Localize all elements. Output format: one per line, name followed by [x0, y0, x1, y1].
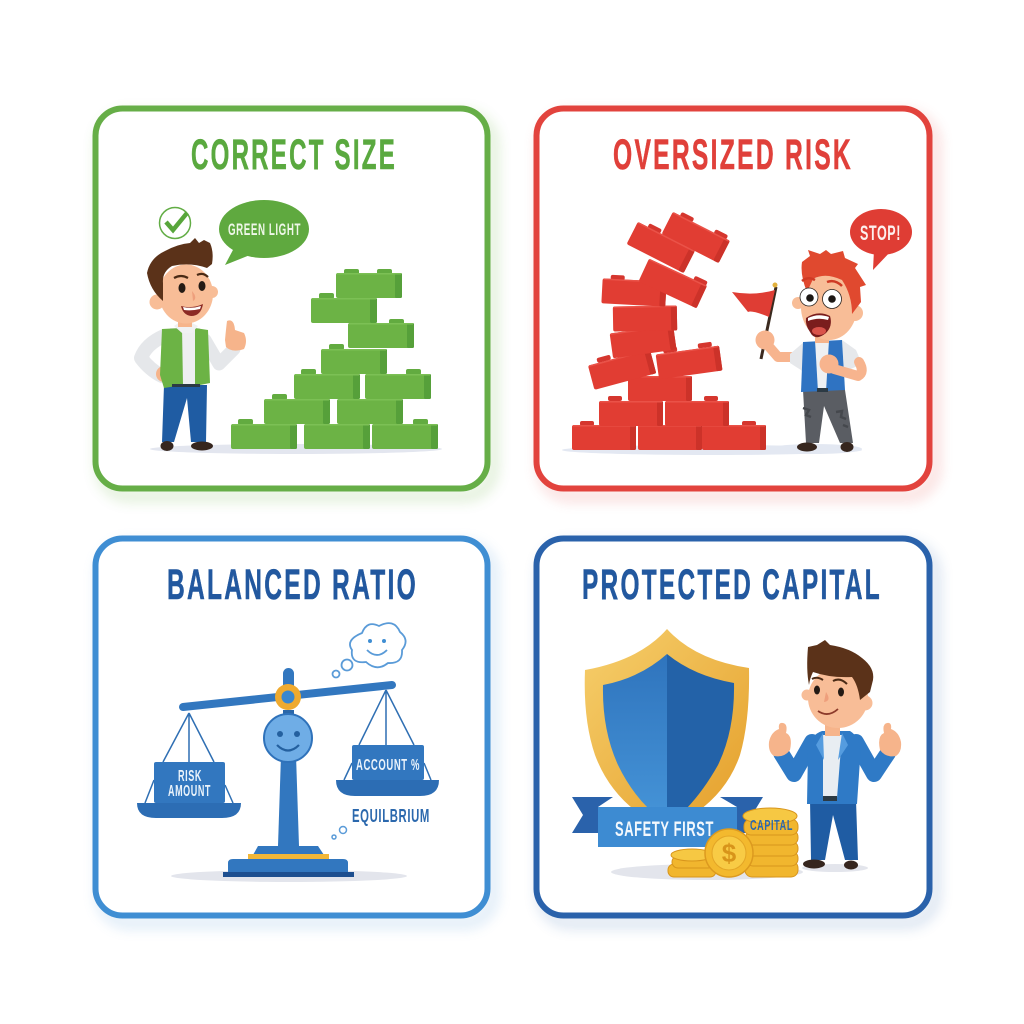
- gold coin stacks: [668, 808, 798, 877]
- speech bubble: green light: [219, 200, 309, 265]
- toppling red bricks: [562, 208, 862, 455]
- gold coin stacks: CAPITAL: [750, 817, 793, 834]
- shield with ribbon: [572, 629, 803, 880]
- title: oversized risk: OVERSIZED RISK: [613, 131, 853, 179]
- label: equilibrium: EQUILBRIUM: [352, 806, 430, 826]
- character: happy trader: [141, 238, 442, 454]
- right pan: account percent: ACCOUNT %: [356, 757, 420, 774]
- speech bubble: stop: [850, 209, 912, 270]
- speech bubble: green light: GREEN LIGHT: [228, 220, 301, 239]
- panel: protected capital: [536, 538, 935, 923]
- left pan: risk amount: RISK: [178, 768, 202, 785]
- big dollar coin: $: [722, 838, 737, 868]
- small thought bubbles: [332, 826, 346, 839]
- ribbon: safety first: SAFETY FIRST: [615, 818, 714, 841]
- speech bubble: stop: STOP!: [860, 222, 901, 245]
- left pan: risk amount: AMOUNT: [168, 783, 211, 800]
- title: balanced ratio: BALANCED RATIO: [167, 561, 418, 609]
- smiley gauge: [264, 714, 312, 762]
- panel: oversized risk: [536, 108, 935, 496]
- right pan: account percent: [336, 690, 439, 796]
- stacked green bricks: [231, 269, 438, 449]
- title: correct size: CORRECT SIZE: [191, 131, 397, 179]
- character: confident trader: [769, 640, 901, 872]
- left pan: risk amount: [137, 713, 241, 818]
- icon: smiling thought cloud: [332, 623, 406, 678]
- icon: red warning flag: [732, 282, 778, 359]
- character: scared trader: [756, 250, 866, 454]
- ribbon: safety first: [598, 807, 737, 847]
- panel: correct size: [96, 108, 493, 496]
- thumbs up hands: [769, 723, 901, 756]
- balance scale: [137, 668, 439, 882]
- panel: balanced ratio: [96, 538, 493, 923]
- icon: check mark badge: [160, 208, 190, 238]
